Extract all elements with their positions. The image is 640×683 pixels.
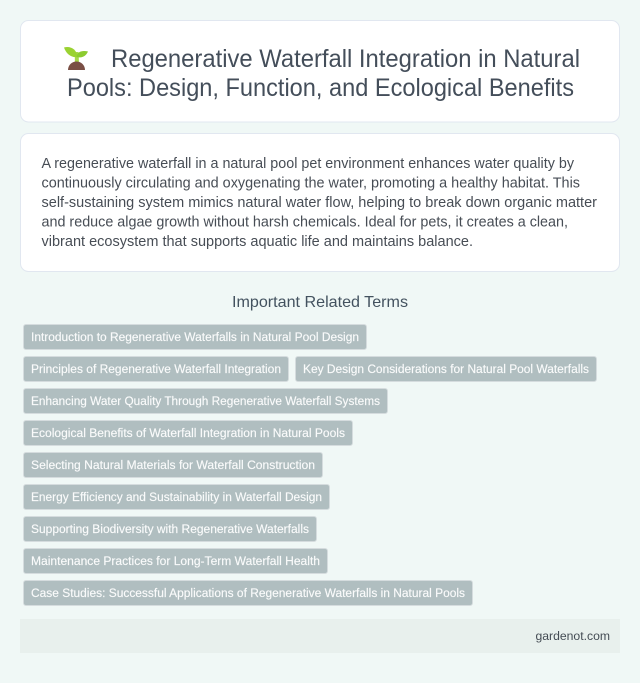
chip 5: Ecological Benefits of Waterfall Integration in Natural Pools: [31, 426, 345, 440]
text block: description: [42, 156, 597, 250]
list: related term chips: [24, 324, 596, 606]
chip 7: [24, 484, 330, 510]
chip 6: Selecting Natural Materials for Waterfall Construction: [31, 458, 315, 472]
panel: title card: [20, 20, 620, 122]
title: Regenerative Waterfall Integration in Natural: [111, 45, 580, 73]
footer: gardenot.com: [536, 629, 610, 643]
chip 4: Enhancing Water Quality Through Regenerative Waterfall Systems: [31, 394, 380, 408]
chip 8: [24, 516, 316, 542]
text block: description: self-sustaining system mimics natural water flow, helping to break down organic matter: [42, 195, 597, 211]
chip 2: [24, 356, 288, 382]
icon: sprout: [64, 47, 88, 70]
chip 7: Energy Efficiency and Sustainability in Waterfall Design: [31, 490, 322, 504]
title: [67, 45, 580, 102]
chip 9: [24, 548, 328, 574]
chip 2: Principles of Regenerative Waterfall Integration: [31, 362, 281, 376]
title: Pools: Design, Function, and Ecological Benefits: [67, 74, 574, 102]
chip 5: [24, 420, 352, 446]
text block: description: and reduce algae growth without harsh chemicals. Ideal for pets, it creates a clean,: [42, 214, 568, 230]
heading: related terms: Important Related Terms: [232, 294, 408, 311]
chip 6: [24, 452, 322, 478]
chip 1: [24, 324, 366, 350]
text block: description: continuously circulating and oxygenating the water, promoting a healthy habitat. This: [42, 176, 580, 192]
chip 8: Supporting Biodiversity with Regenerative Waterfalls: [31, 522, 309, 536]
chip 9: Maintenance Practices for Long-Term Waterfall Health: [31, 554, 320, 568]
text block: description: A regenerative waterfall in a natural pool pet environment enhances water quality by: [42, 156, 575, 172]
chip 10: [24, 580, 472, 606]
text block: description: vibrant ecosystem that supports aquatic life and maintains balance.: [42, 234, 473, 250]
chip 1: Introduction to Regenerative Waterfalls in Natural Pool Design: [31, 330, 359, 344]
footer: [20, 619, 620, 653]
panel: description: [20, 134, 620, 272]
chip 4: [24, 388, 388, 414]
chip 3: Key Design Considerations for Natural Pool Waterfalls: [303, 362, 589, 376]
chip 10: Case Studies: Successful Applications of Regenerative Waterfalls in Natural Pools: [31, 586, 465, 600]
chip 3: [296, 356, 596, 382]
